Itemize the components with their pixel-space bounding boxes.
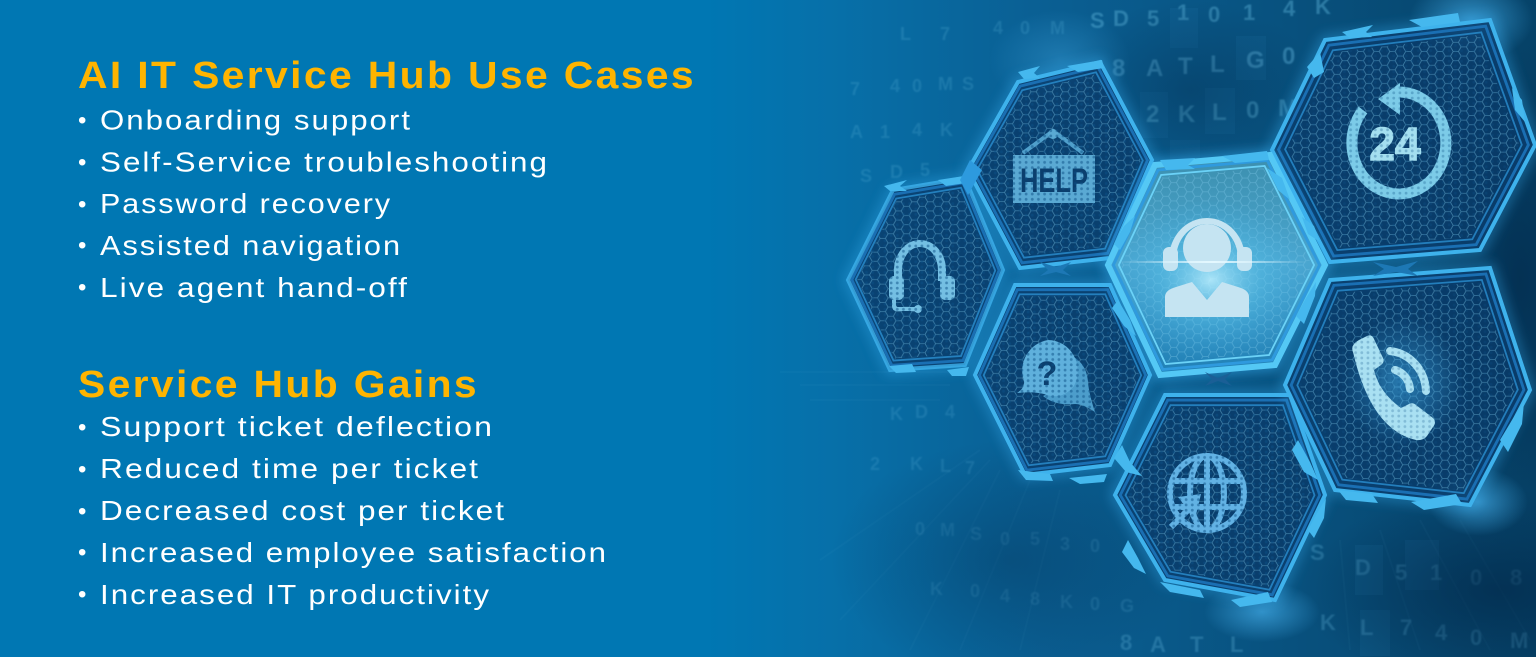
digital letter texture: T bbox=[1190, 632, 1204, 657]
digital letter texture: 5 bbox=[1030, 529, 1040, 549]
digital letter texture: A bbox=[1150, 632, 1166, 657]
hexagon: phone bbox=[1285, 268, 1530, 505]
list: gains: • bbox=[78, 456, 86, 483]
digital letter texture: 8 bbox=[1030, 589, 1040, 609]
digital letter texture: 0 bbox=[1246, 97, 1259, 124]
digital letter texture: S bbox=[1310, 540, 1325, 565]
digital letter texture: 0 bbox=[1470, 565, 1482, 590]
digital letter texture: G bbox=[1120, 596, 1134, 616]
digital letter texture: K bbox=[1060, 592, 1073, 612]
digital letter texture: 2 bbox=[870, 454, 880, 474]
digital letter texture: K bbox=[890, 404, 903, 424]
digital letter texture: 4 bbox=[890, 76, 900, 96]
list: use cases: Self-Service troubleshooting bbox=[100, 146, 549, 178]
list: gains: Support ticket deflection bbox=[100, 411, 494, 442]
icon: telephone bbox=[1343, 317, 1463, 447]
list: gains: • bbox=[78, 581, 86, 608]
digital letter texture: 8 bbox=[1510, 565, 1522, 590]
digital letter texture: L bbox=[1210, 51, 1225, 78]
digital letter texture: M bbox=[938, 74, 953, 94]
digital letter texture: G bbox=[1246, 47, 1265, 74]
list: gains: Decreased cost per ticket bbox=[100, 495, 506, 526]
digital letter texture: D bbox=[890, 162, 903, 182]
icon: agent with headset bbox=[1163, 218, 1252, 317]
icon: help sign: HELP bbox=[1020, 162, 1088, 200]
list: use cases: Assisted navigation bbox=[100, 230, 402, 261]
digital letter texture: D bbox=[915, 402, 928, 422]
digital letter texture: 1 bbox=[1430, 560, 1442, 585]
list: gains: • bbox=[78, 539, 86, 566]
perspective streaks bbox=[780, 372, 1530, 650]
list: gains: Increased employee satisfaction bbox=[100, 537, 608, 568]
hexagon: globe bbox=[1115, 395, 1325, 600]
digital letter texture: D bbox=[1355, 555, 1371, 580]
digital letter texture: M bbox=[1510, 628, 1528, 653]
list: gains: Increased IT productivity bbox=[100, 579, 491, 610]
digital letter texture: 5 bbox=[1395, 560, 1407, 585]
icon: globe with cursor bbox=[1170, 456, 1244, 530]
digital letter texture: 0 bbox=[1000, 529, 1010, 549]
digital letter texture: 1 bbox=[1177, 0, 1189, 25]
digital letter texture: 2 bbox=[1146, 101, 1159, 128]
list: gains: Reduced time per ticket bbox=[100, 453, 480, 484]
digital letter texture: 5 bbox=[1147, 6, 1159, 31]
list: use cases bbox=[78, 104, 549, 303]
digital letter texture: 4 bbox=[912, 120, 922, 140]
digital letter texture: 8 bbox=[1112, 55, 1125, 82]
digital letter texture: 7 bbox=[940, 24, 950, 44]
digital letter texture: S bbox=[860, 166, 872, 186]
digital letter texture: S bbox=[970, 524, 982, 544]
list: gains: • bbox=[78, 414, 86, 441]
hexagon: central agent bbox=[1108, 155, 1325, 375]
list: use cases: • bbox=[78, 107, 86, 134]
hexagon: question bubbles bbox=[975, 285, 1150, 475]
icon: 24 hour arrow: 24 bbox=[1369, 118, 1421, 170]
digital letter texture: L bbox=[940, 456, 951, 476]
heading: use cases: AI IT Service Hub Use Cases bbox=[78, 55, 696, 97]
list: gains: • bbox=[78, 498, 86, 525]
hexagon: small headset bbox=[848, 178, 1003, 370]
digital letter texture: 0 bbox=[1208, 2, 1220, 27]
list: use cases: Onboarding support bbox=[100, 104, 412, 136]
digital letter texture: 4 bbox=[1435, 620, 1448, 645]
icon: help sign bbox=[1013, 129, 1095, 203]
list: use cases: • bbox=[78, 191, 86, 218]
digital letter texture: 1 bbox=[880, 122, 890, 142]
list: use cases: Password recovery bbox=[100, 188, 392, 219]
list: use cases: • bbox=[78, 149, 86, 176]
digital letter texture: K bbox=[1320, 610, 1336, 635]
digital letter texture: M bbox=[1278, 95, 1298, 122]
digital letter texture: K bbox=[930, 579, 943, 599]
digital letter texture: M bbox=[940, 520, 955, 540]
digital letter texture: 7 bbox=[850, 79, 860, 99]
digital letter texture: T bbox=[1178, 53, 1193, 80]
hexagon: help sign bbox=[968, 62, 1152, 268]
list: use cases: • bbox=[78, 232, 86, 259]
digital letter texture: 0 bbox=[1020, 18, 1030, 38]
digital letter texture: 7 bbox=[1400, 615, 1412, 640]
digital letter texture: 0 bbox=[1470, 625, 1482, 650]
hexagon: 24 hours bbox=[1272, 20, 1535, 262]
icon: question speech bubbles: ? bbox=[1037, 355, 1057, 393]
digital letter texture: 4 bbox=[945, 402, 955, 422]
digital letter texture: 0 bbox=[970, 581, 980, 601]
digital letter texture: 0 bbox=[1090, 536, 1100, 556]
digital letter texture: 4 bbox=[993, 18, 1003, 38]
digital letter texture: A bbox=[1146, 55, 1163, 82]
list: use cases: • bbox=[78, 274, 86, 301]
digital letter tiles bbox=[1140, 8, 1439, 656]
digital letter texture: S bbox=[962, 74, 974, 94]
icon: question speech bubbles bbox=[1017, 340, 1095, 412]
digital letter texture: 0 bbox=[1090, 594, 1100, 614]
digital letter texture: 3 bbox=[1060, 534, 1070, 554]
digital letter texture: A bbox=[850, 122, 863, 142]
digital letter texture: 0 bbox=[915, 519, 925, 539]
digital letter texture bbox=[850, 0, 1528, 657]
digital letter texture: 7 bbox=[965, 458, 975, 478]
icon: 24 hour arrow bbox=[1352, 83, 1446, 194]
digital letter texture: L bbox=[1360, 615, 1373, 640]
digital letter texture: 5 bbox=[920, 160, 930, 180]
digital letter texture: K bbox=[1178, 101, 1196, 128]
digital letter texture: 8 bbox=[1120, 630, 1132, 655]
digital letter texture: L bbox=[1212, 99, 1227, 126]
digital letter texture: L bbox=[900, 24, 911, 44]
list: use cases: Live agent hand-off bbox=[100, 272, 409, 303]
digital letter texture: 1 bbox=[1243, 0, 1255, 25]
icon: headset bbox=[889, 240, 955, 313]
digital letter texture: K bbox=[910, 454, 923, 474]
digital letter texture: M bbox=[1050, 18, 1065, 38]
digital letter texture: 0 bbox=[1282, 43, 1295, 70]
list: gains bbox=[78, 411, 608, 610]
digital letter texture: D bbox=[1113, 6, 1129, 31]
digital letter texture: 4 bbox=[1000, 586, 1010, 606]
digital letter texture: S bbox=[1090, 8, 1105, 33]
arrow spikes on hexagon edges bbox=[884, 13, 1525, 607]
digital letter texture: L bbox=[1230, 632, 1243, 657]
heading: gains: Service Hub Gains bbox=[78, 364, 479, 406]
digital letter texture: 0 bbox=[912, 76, 922, 96]
digital letter texture: K bbox=[940, 120, 953, 140]
